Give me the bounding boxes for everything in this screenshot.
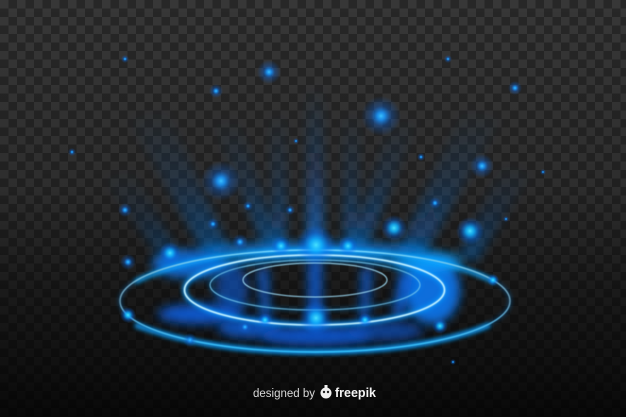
ring 3 [210, 260, 420, 310]
ring 2 bright [184, 255, 444, 325]
ring 1 outer [120, 250, 510, 352]
freepik attribution [253, 385, 376, 400]
portal blue glow patches [152, 243, 462, 346]
ring sparks [120, 215, 499, 347]
light rays rising from portal [105, 85, 530, 264]
freepik logo text: freepik [335, 386, 376, 400]
ring 4 inner [243, 263, 387, 297]
attribution text: designed by [253, 388, 315, 400]
icon: freepik mascot [320, 385, 332, 398]
portal rings [120, 250, 510, 352]
rays inside portal [258, 268, 414, 322]
floating particles [68, 55, 546, 365]
